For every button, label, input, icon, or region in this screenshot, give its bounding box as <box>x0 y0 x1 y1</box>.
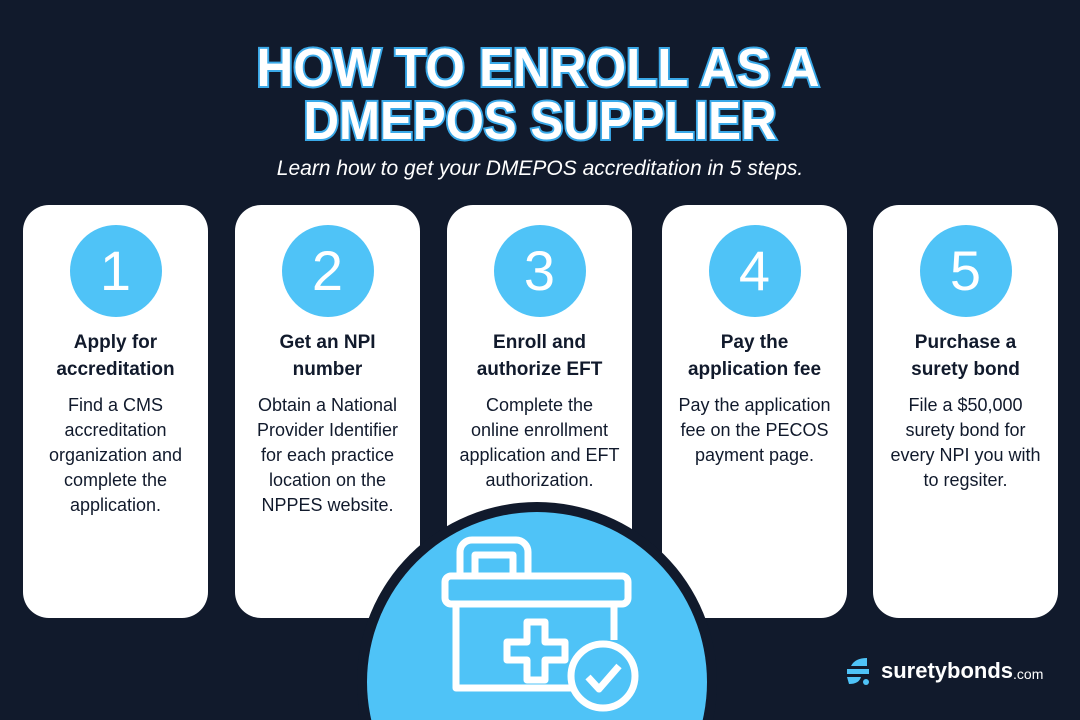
subtitle: Learn how to get your DMEPOS accreditation in 5 steps. <box>277 157 803 180</box>
panel: step 1: application. <box>70 495 161 515</box>
panel: step 2: number <box>293 359 362 380</box>
panel: step 1: organization and <box>49 445 182 465</box>
panel: step 1: accreditation <box>56 359 175 380</box>
panel: step 1: Apply for <box>74 332 157 353</box>
panel: step 3: Complete the <box>486 395 593 415</box>
logo <box>847 658 1043 685</box>
logo: suretybonds <box>881 658 1013 683</box>
panel: step 4: fee on the PECOS <box>680 420 829 440</box>
panel: step 2: Get an NPI <box>279 332 376 353</box>
panel: step 3: 3 <box>524 239 555 302</box>
panel: step 4 <box>662 205 847 618</box>
panel: step 2: for each practice <box>261 445 394 465</box>
title: HOW TO ENROLL AS A <box>256 38 820 98</box>
panel: step 1 <box>23 205 208 618</box>
panel: step 5: to regsiter. <box>923 470 1008 490</box>
panel: step 1: accreditation <box>64 420 167 440</box>
panel: step 3: authorize EFT <box>477 359 602 380</box>
panel: step 5: surety bond for <box>905 420 1026 440</box>
logo: .com <box>1013 666 1043 682</box>
panel: step 2: 2 <box>312 239 343 302</box>
panel: step 5: File a $50,000 <box>908 395 1023 415</box>
panel: step 3: application and EFT <box>459 445 620 465</box>
panel: step 5: surety bond <box>911 359 1020 380</box>
panel: step 5: every NPI you with <box>890 445 1041 465</box>
panel: step 5: 5 <box>950 239 981 302</box>
panel: step 2: location on the <box>269 470 386 490</box>
panel: step 2: NPPES website. <box>261 495 394 515</box>
panel: step 4: Pay the application <box>678 395 831 415</box>
panel: step 4: 4 <box>739 239 770 302</box>
panel: step 3: online enrollment <box>471 420 608 440</box>
title <box>256 38 821 150</box>
panel: step 3: authorization. <box>485 470 594 490</box>
panel: step 2: Provider Identifier <box>257 420 398 440</box>
title: DMEPOS SUPPLIER <box>304 91 776 150</box>
panel: step 5 <box>873 205 1058 618</box>
panel: step 1: Find a CMS <box>68 395 163 415</box>
panel: step 1: 1 <box>100 239 131 302</box>
panel: step 4: Pay the <box>721 332 788 353</box>
panel: step 3: Enroll and <box>493 332 586 353</box>
panel: step 2 <box>235 205 420 618</box>
panel: step 3 <box>447 205 632 618</box>
panel: step 1: complete the <box>64 470 167 490</box>
icon: medical kit with check <box>367 502 707 720</box>
panel: step 2: Obtain a National <box>258 395 397 415</box>
panel: step 4: application fee <box>688 359 821 380</box>
panel: step 5: Purchase a <box>915 332 1016 353</box>
panel: step 4: payment page. <box>695 445 814 465</box>
